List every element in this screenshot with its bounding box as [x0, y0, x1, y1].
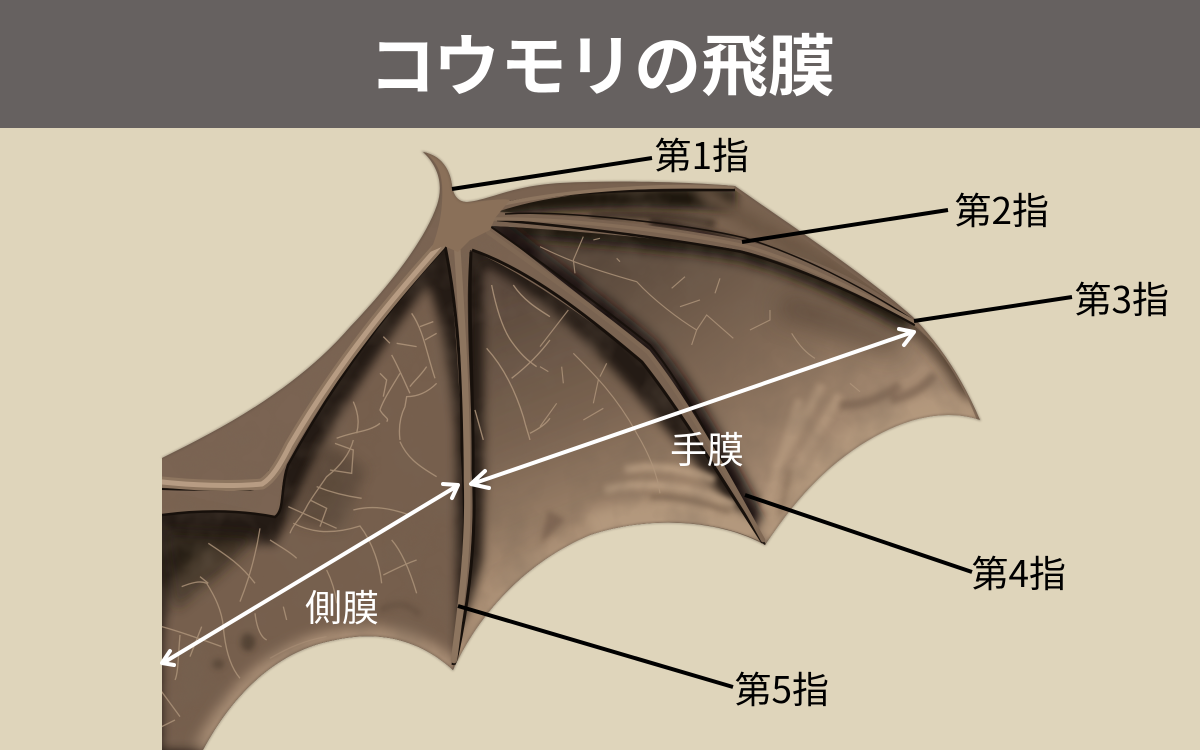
bone: finger 3 — [490, 219, 978, 418]
leader line: finger 5 — [458, 606, 733, 687]
bone: arm — [162, 245, 440, 485]
leader line: finger 1 — [452, 158, 652, 189]
leader line: finger 2 — [742, 210, 948, 242]
bone: finger 2 — [490, 186, 733, 207]
leader line: finger 3 — [914, 297, 1072, 321]
veins: side membrane (lower) — [162, 440, 437, 727]
label: finger 3: 第3指 — [1074, 270, 1169, 324]
veins: finger 4-5 cell (upper) — [475, 285, 550, 440]
label: hand membrane: 手膜 — [670, 420, 744, 474]
bone: finger 4 — [592, 305, 766, 542]
bone: finger 5 — [454, 245, 467, 660]
bones — [162, 152, 978, 660]
membrane cell: side membrane — [162, 250, 463, 750]
label: finger 1: 第1指 — [654, 126, 749, 180]
label: finger 4: 第4指 — [972, 544, 1066, 598]
label: finger 2: 第2指 — [954, 181, 1049, 235]
dark mottling — [290, 440, 365, 530]
wrist and thumb — [424, 152, 510, 252]
membrane cell: between fingers 3 and 4 — [492, 226, 980, 544]
membrane cell: between fingers 4 and 5 — [453, 250, 760, 670]
leader line: finger 4 — [745, 495, 972, 572]
arrow: hand membrane span — [471, 329, 914, 488]
title banner — [0, 0, 1200, 128]
arrow: side membrane span — [162, 484, 458, 665]
streaks — [765, 385, 840, 510]
title: コウモリの飛膜 — [369, 13, 835, 110]
black contour lines — [162, 190, 915, 665]
veins: side membrane (upper) — [337, 313, 437, 440]
membrane cell: between fingers 2 and 3 — [500, 188, 892, 302]
label: side membrane: 側膜 — [305, 578, 379, 632]
wing soft edge — [162, 152, 980, 750]
arm patagium — [162, 294, 380, 458]
label: finger 5: 第5指 — [734, 660, 829, 714]
veins: hand membrane — [540, 237, 860, 493]
streaks — [605, 467, 735, 505]
mottled skin texture — [162, 192, 959, 744]
illustration: bat wing — [150, 140, 1000, 750]
